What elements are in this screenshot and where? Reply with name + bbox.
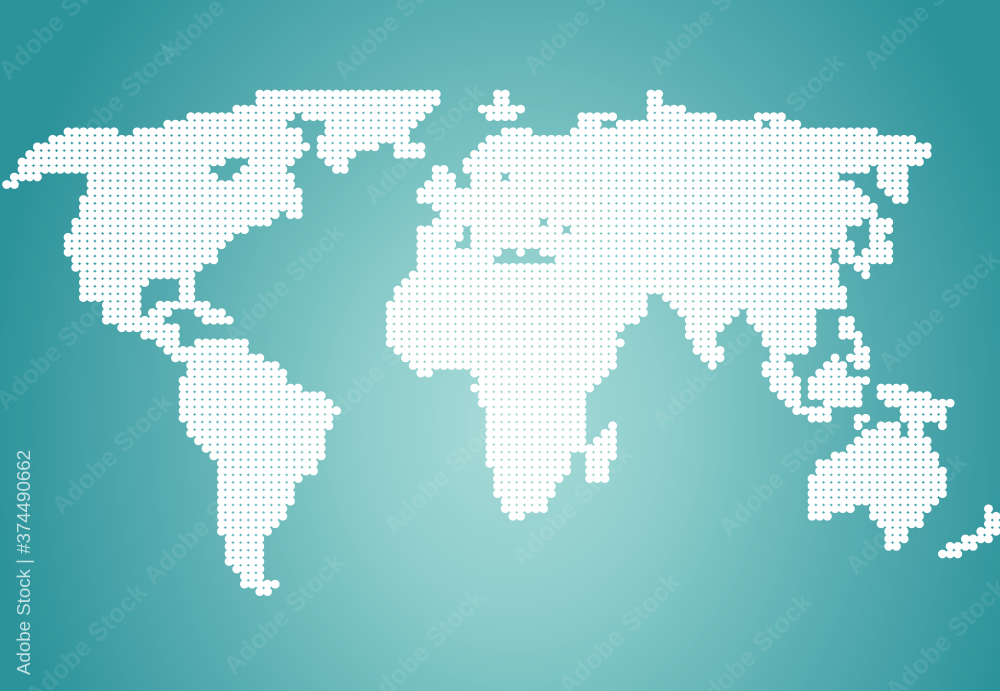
- North America and Greenland: [7, 94, 437, 343]
- watermark pattern: Adobe Stock: [357, 76, 491, 210]
- watermark pattern: Adobe Stock: [137, 456, 271, 590]
- watermark pattern: Adobe Stock: [217, 546, 351, 680]
- watermark pattern: Adobe Stock: [377, 406, 511, 540]
- Europe, Asia and Africa: [390, 94, 928, 516]
- stock id side text: Adobe Stock | #374490662: [13, 450, 34, 675]
- watermark pattern: Adobe Stock: [717, 46, 851, 180]
- Indonesia, Philippines, Australia and New Zealand: [812, 320, 997, 554]
- watermark pattern: Adobe Stock: [52, 31, 186, 165]
- watermark pattern: Adobe Stock: [712, 408, 846, 542]
- watermark pattern: Adobe Stock: [312, 301, 446, 435]
- watermark pattern: Adobe Stock: [839, 446, 973, 580]
- watermark pattern: Adobe Stock: [645, 301, 779, 435]
- South America: [168, 343, 337, 592]
- watermark pattern: Adobe Stock: [217, 216, 351, 350]
- watermark pattern: Adobe Stock: [45, 386, 179, 520]
- dotted world map: [7, 94, 997, 592]
- watermark pattern: Adobe Stock: [505, 438, 639, 572]
